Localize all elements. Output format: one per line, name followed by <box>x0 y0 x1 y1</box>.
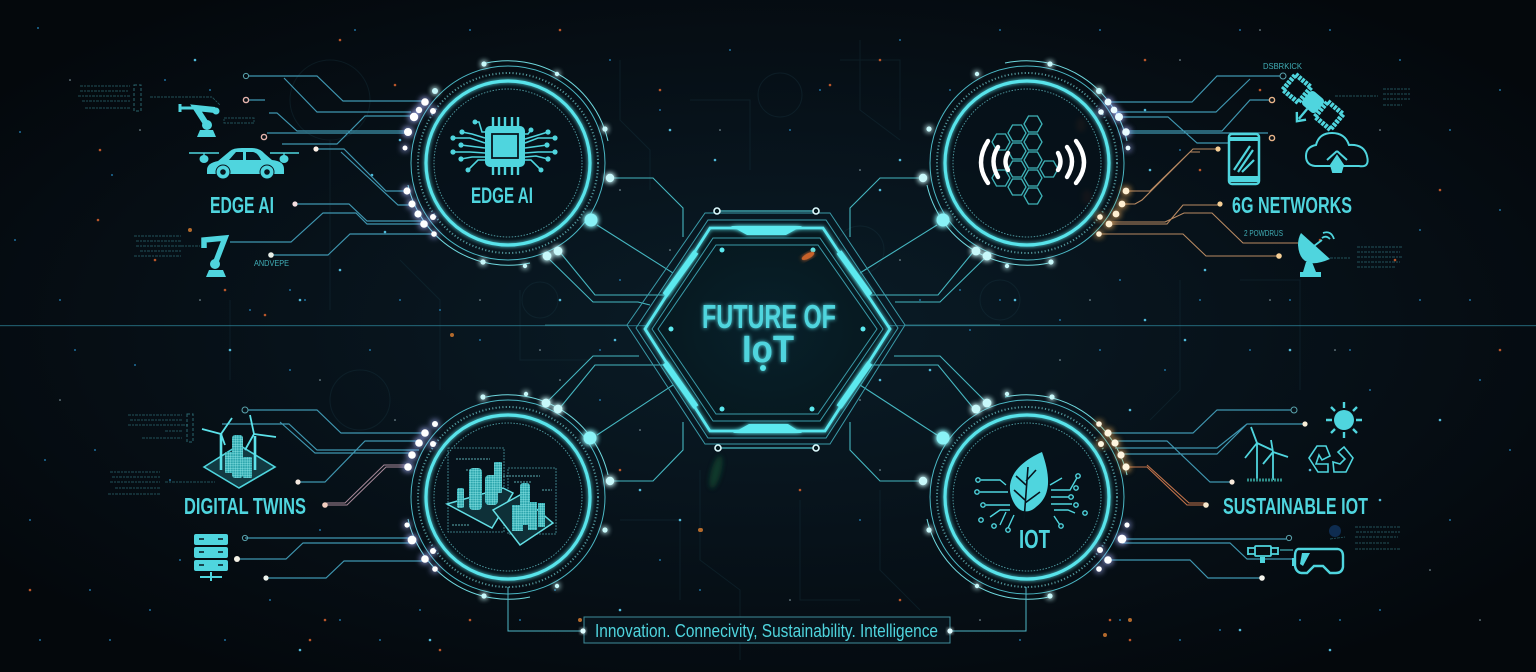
dots: edge ai terminals <box>402 98 437 237</box>
panel: edge ai ring content <box>450 117 558 208</box>
icon: leaf <box>1010 452 1048 520</box>
small labels: 6g: DSBRKICK <box>1263 62 1303 71</box>
micro text: edge ai <box>78 85 254 256</box>
micro text: digital twins <box>108 414 215 494</box>
icon: chip <box>450 117 558 175</box>
icon: server stack <box>194 534 228 581</box>
panel: digital twins circuit lines <box>222 407 438 581</box>
6g end terminals <box>1215 73 1286 259</box>
icon: hexagon mesh <box>992 116 1058 204</box>
panel: sustainable iot circuit lines <box>1096 407 1308 581</box>
dots: 6g terminals upper <box>1098 98 1130 150</box>
icon: recycle <box>1309 446 1353 472</box>
blueprint frames <box>448 448 556 534</box>
hollow and label terminals <box>243 73 319 258</box>
icon: satellite dish <box>1298 232 1334 277</box>
dots: sustainable terminals upper <box>1096 421 1130 471</box>
dots: 6g terminals lower <box>1096 188 1129 237</box>
panel: digital twins ring content <box>447 448 556 545</box>
digital twins end terminals <box>234 407 328 581</box>
icon: robot arm lower <box>204 238 226 277</box>
small label: ANDVEPE <box>254 259 289 268</box>
circuit traces <box>975 474 1087 532</box>
icon: cloud upload <box>1306 133 1368 172</box>
outer ring nodes: digital twins <box>480 392 614 599</box>
hexagon orange streak <box>801 250 815 262</box>
label: edge ai ring: EDGE AI <box>471 183 533 208</box>
sustainable end terminals <box>1203 407 1308 581</box>
label: 6g networks: 6G NETWORKS <box>1232 192 1352 218</box>
outer ring nodes: edge ai <box>432 61 614 268</box>
tagline box <box>580 617 953 643</box>
hexagon hollow terminals <box>714 208 819 451</box>
city model right <box>493 483 553 545</box>
small labels: 6g <box>1244 62 1303 238</box>
label: iot ring: IOT <box>1019 524 1050 554</box>
label: edge ai: EDGE AI <box>210 192 274 218</box>
ring: digital twins <box>408 395 608 599</box>
connectors: rings to central hexagon <box>545 178 1000 481</box>
micro text: sustainable <box>1330 527 1400 549</box>
ring: edge ai <box>408 61 608 265</box>
small labels: 6g: 2 POWDRUS <box>1244 229 1283 238</box>
label: digital twins: DIGITAL TWINS <box>184 493 306 519</box>
tagline box: Innovation. Connecivity, Sustainability. Intelligence <box>595 621 938 641</box>
icon: smartphone <box>1229 134 1259 184</box>
panel: edge ai circuit lines <box>230 73 437 258</box>
tagline connector lines <box>508 587 1026 631</box>
blueprint annotation marks <box>452 459 552 525</box>
hexagon bright frame <box>645 228 890 431</box>
icon: wind turbines <box>1245 427 1288 480</box>
label: sustainable iot: SUSTAINABLE IOT <box>1223 493 1368 519</box>
central hexagon <box>627 208 905 451</box>
title <box>702 298 836 371</box>
panel: 6g circuit lines <box>1096 73 1300 259</box>
micro text: 6g <box>1330 89 1410 267</box>
icon: wearable sensor <box>1248 546 1293 563</box>
icon: robot arm <box>180 104 220 137</box>
horizontal light beam <box>0 325 1536 326</box>
dots: digital twins terminals <box>404 421 438 572</box>
hexagon outer frames <box>627 213 905 444</box>
icon: sun <box>1326 402 1362 438</box>
icon: vr goggles <box>1293 525 1343 573</box>
icon: signal waves <box>981 141 1084 183</box>
ring: sustainable iot <box>927 395 1127 599</box>
ambient colour smudges <box>707 118 1092 490</box>
hexagon highlight bars <box>665 226 870 433</box>
icon: flying car <box>189 148 299 179</box>
faint circuit backdrop <box>230 40 1300 660</box>
title: FUTURE OF <box>702 298 836 335</box>
ring: 6g networks <box>927 61 1127 265</box>
hexagon node dots <box>668 248 866 412</box>
outer ring nodes: sustainable <box>919 392 1055 599</box>
icon: satellite <box>1273 74 1343 141</box>
panel: 6g ring content <box>981 116 1084 204</box>
outer ring nodes: 6g <box>919 61 1102 268</box>
icon: digital twin city <box>202 415 276 488</box>
dots: sustainable terminals lower <box>1096 522 1130 572</box>
title: IoT <box>742 329 794 371</box>
city model left <box>447 462 513 528</box>
panel: sustainable iot ring content <box>975 452 1087 554</box>
